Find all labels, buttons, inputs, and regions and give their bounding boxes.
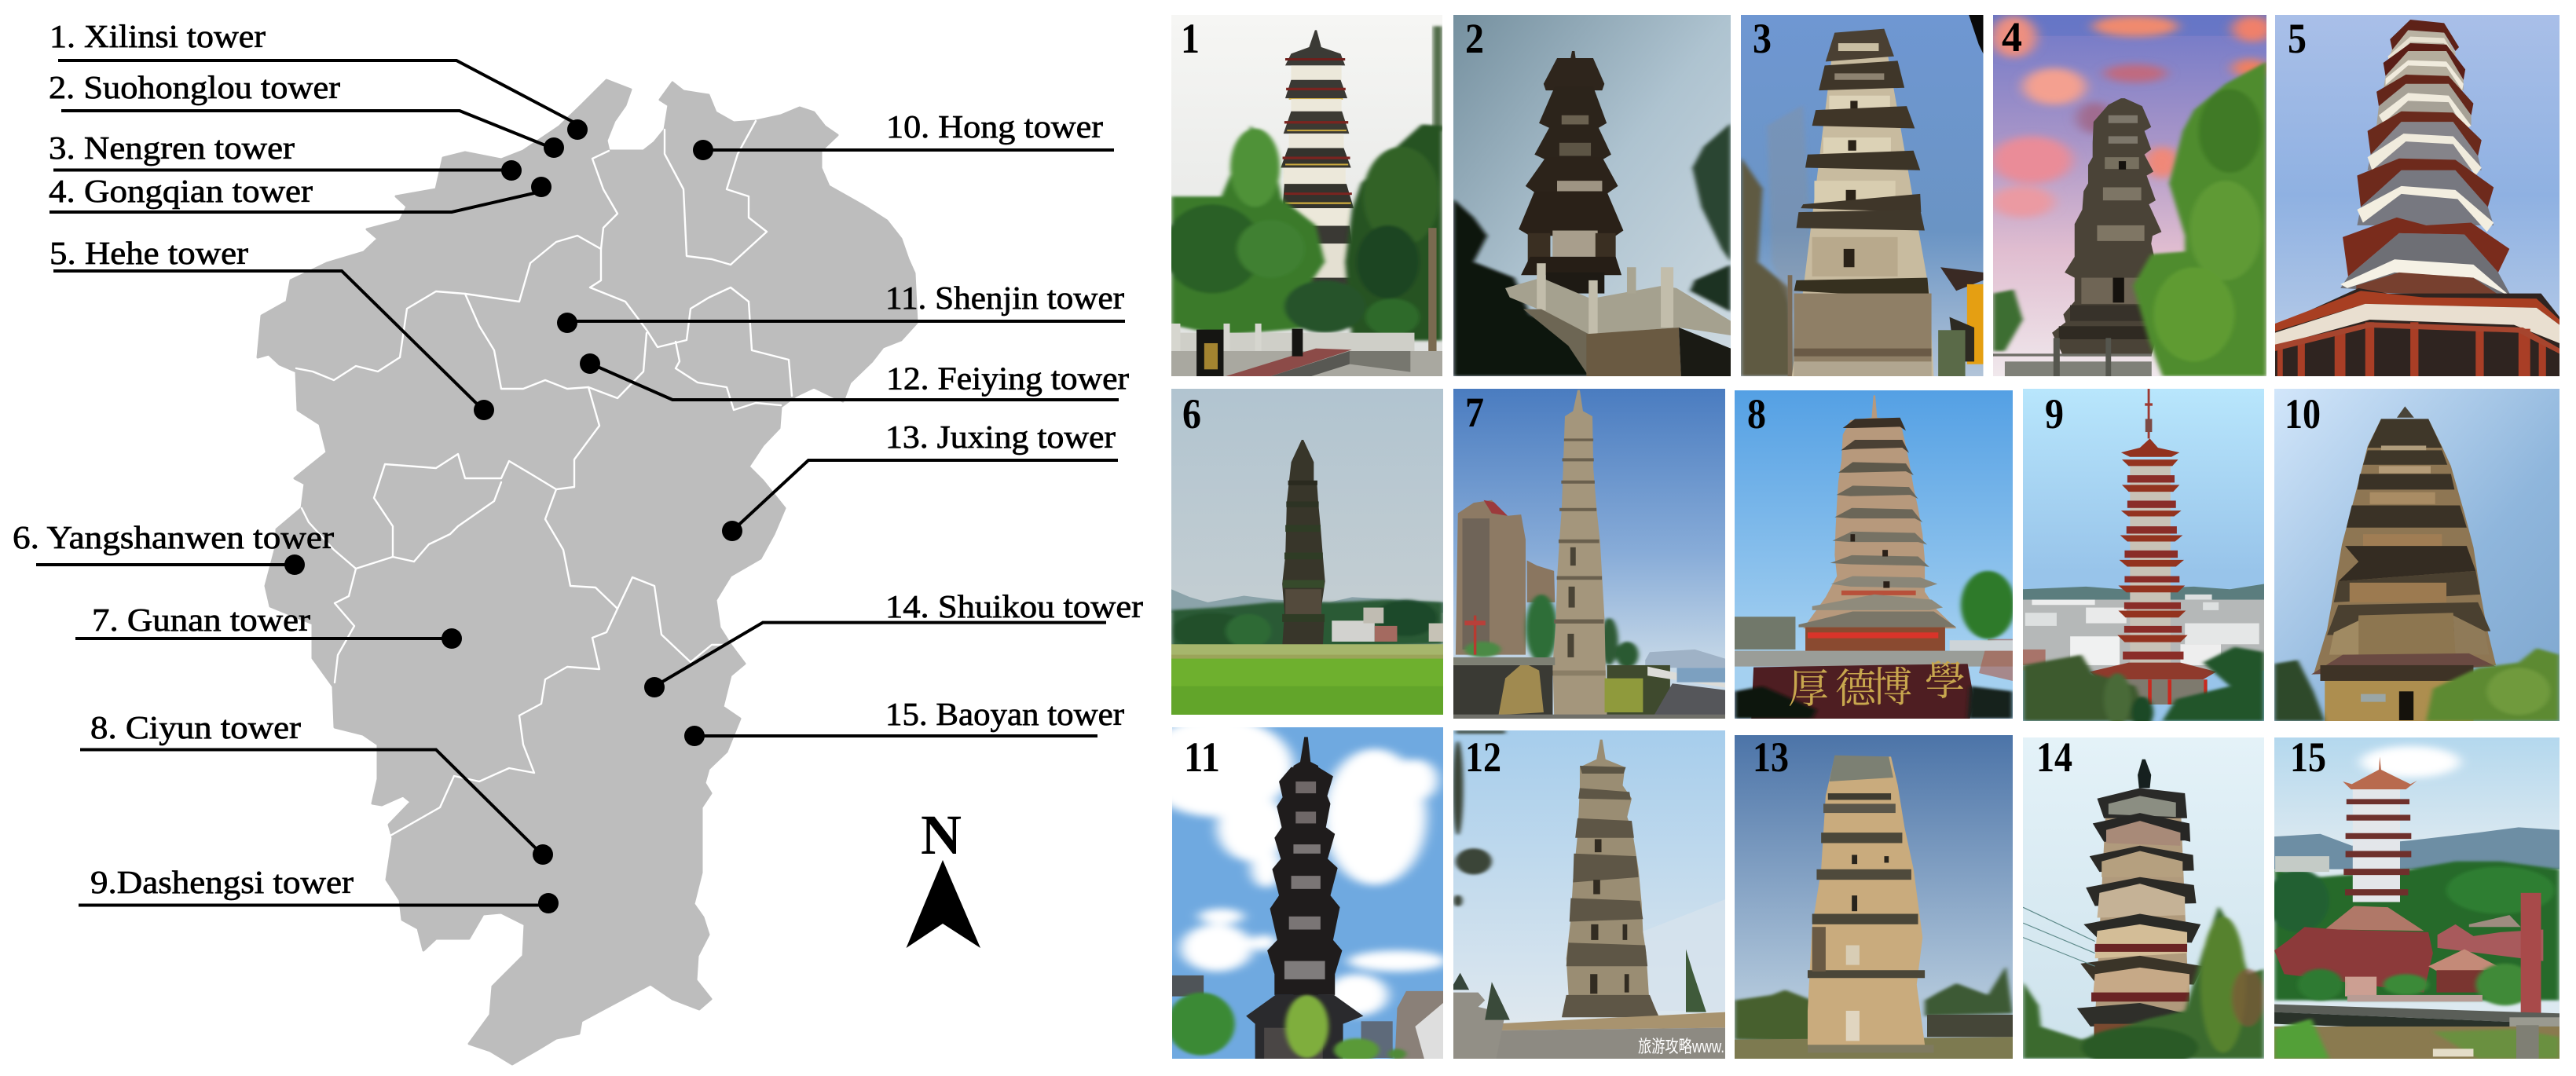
panel: photo 2 Suohonglou tower: [1453, 15, 1731, 376]
callout: 14. Shuikou tower: [644, 588, 1143, 697]
callout: 9.Dashengsi tower: 9.Dashengsi tower: [90, 864, 354, 900]
panel: photo 4 Gongqian tower: [1992, 13, 2273, 376]
number 7: 7: [1465, 389, 1484, 436]
callout: 13. Juxing tower: [722, 419, 1118, 541]
callout: 12. Feiying tower: 12. Feiying tower: [886, 360, 1129, 396]
map of province: [258, 80, 917, 1064]
callout: 15. Baoyan tower: [684, 696, 1124, 746]
north arrow: [907, 803, 980, 948]
sign text 3: 博: [1871, 666, 1912, 711]
callout: 14. Shuikou tower: 14. Shuikou tower: [885, 588, 1143, 624]
number 13: 13: [1753, 734, 1789, 781]
callout: 15. Baoyan tower: 15. Baoyan tower: [885, 696, 1124, 732]
panel: photo 11 Shenjin tower: [1140, 717, 1447, 1062]
panel: photo 1 Xilinsi tower: [1163, 15, 1442, 376]
callout: 8. Ciyun tower: 8. Ciyun tower: [90, 709, 301, 745]
panel: photo 7 Gunan tower: [1453, 389, 1725, 719]
callout: 7. Gunan tower: 7. Gunan tower: [92, 602, 310, 638]
panel: photo 10 Hong tower: [2274, 389, 2560, 721]
sign text 2: 德: [1835, 668, 1878, 712]
north arrow: N: [921, 803, 962, 866]
number 2: 2: [1465, 15, 1484, 62]
callout: 11. Shenjin tower: [557, 280, 1125, 333]
callout: 2. Suohonglou tower: [49, 69, 564, 158]
callout: 8. Ciyun tower: [80, 709, 553, 865]
panel: photo 9 Dashengsi tower: [2023, 389, 2264, 728]
callout: 4. Gongqian tower: [49, 173, 551, 212]
callout: 1. Xilinsi tower: [49, 18, 588, 140]
panel: photo 14 Shuikou tower: [2023, 734, 2264, 1068]
callout: 6. Yangshanwen tower: 6. Yangshanwen tower: [13, 519, 334, 555]
callout: 11. Shenjin tower: 11. Shenjin tower: [885, 280, 1124, 316]
panel: photo 6 Yangshanwen tower: [1171, 389, 1443, 715]
sign text 4: 學: [1925, 660, 1966, 705]
callout: 5. Hehe tower: 5. Hehe tower: [49, 235, 248, 271]
watermark text: 旅游攻略www.: [1638, 1037, 1724, 1056]
panel: photo 3 Nengren tower: [1741, 15, 1983, 376]
number 9: 9: [2045, 390, 2064, 437]
number 3: 3: [1753, 15, 1772, 62]
panel: photo 8 Ciyun tower: [1735, 390, 2015, 719]
callout: 3. Nengren tower: 3. Nengren tower: [49, 130, 295, 166]
callout: 5. Hehe tower: [49, 235, 494, 420]
number 12: 12: [1465, 734, 1501, 781]
number 4: 4: [2002, 13, 2022, 60]
panel: photo 5 Hehe tower: [2275, 15, 2560, 376]
callout: 13. Juxing tower: 13. Juxing tower: [885, 419, 1116, 455]
panel: photo 15 Baoyan tower: [2266, 734, 2560, 1059]
callout: 6. Yangshanwen tower: [13, 519, 334, 575]
callout: 10. Hong tower: 10. Hong tower: [886, 108, 1103, 145]
panel: photo 12 Feiying tower: [1453, 730, 1725, 1059]
callout: 9.Dashengsi tower: [79, 864, 559, 913]
number 10: 10: [2285, 390, 2321, 437]
panel: location map: [13, 18, 1143, 1064]
number 6: 6: [1182, 390, 1201, 437]
number 8: 8: [1747, 390, 1766, 437]
number 15: 15: [2290, 734, 2326, 781]
number 14: 14: [2036, 734, 2072, 781]
callout: 10. Hong tower: [693, 108, 1114, 160]
callout: 4. Gongqian tower: 4. Gongqian tower: [49, 173, 313, 209]
number 11: 11: [1184, 734, 1220, 781]
callout: 2. Suohonglou tower: 2. Suohonglou tower: [49, 69, 340, 105]
number 5: 5: [2288, 15, 2307, 62]
panel: photo 13 Juxing tower: [1735, 734, 2013, 1059]
callout: 1. Xilinsi tower: 1. Xilinsi tower: [49, 18, 266, 54]
callout: 3. Nengren tower: [49, 130, 522, 181]
number 1: 1: [1181, 15, 1200, 62]
callout: 7. Gunan tower: [75, 602, 462, 649]
callout: 12. Feiying tower: [580, 353, 1129, 400]
sign text: 厚: [1788, 668, 1829, 712]
